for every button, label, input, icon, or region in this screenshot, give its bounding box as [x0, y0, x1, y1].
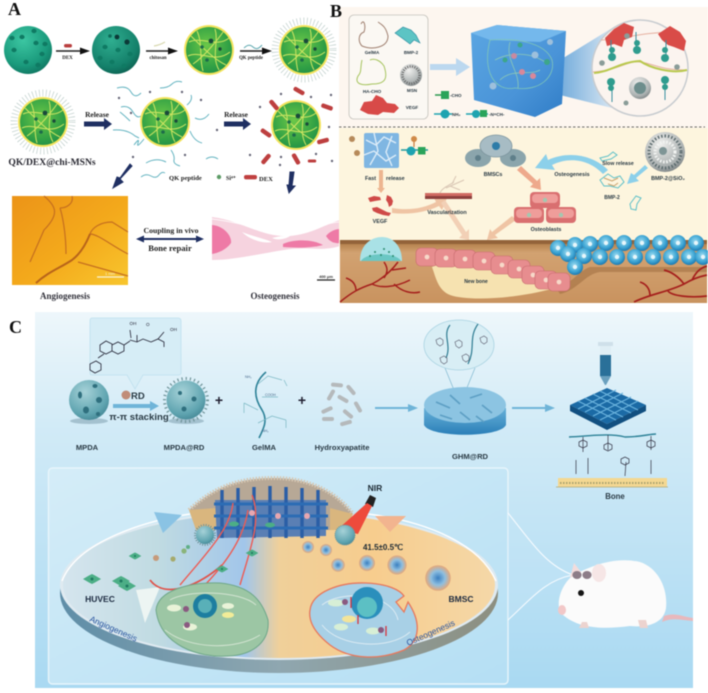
arrow: DEX loading: DEX [62, 56, 73, 61]
icon: MPDA@RD sphere [164, 378, 208, 424]
arrow: vessel to new bone [441, 200, 469, 240]
callout: RD molecule: OH [130, 321, 136, 326]
legend: QK peptide [169, 175, 202, 182]
arrow: osteogenesis curved [535, 154, 608, 174]
icon: GHM@RD hydrogel disc [424, 387, 506, 435]
hydrogel cube [471, 25, 566, 117]
stem cells [302, 541, 451, 591]
label: Fast release: release [386, 176, 405, 182]
magnified crosslink circle [592, 20, 688, 116]
label: RD: RD [131, 391, 145, 402]
label: Osteogenesis: Osteogenesis [250, 291, 300, 301]
arrow: to osteogenesis [287, 172, 295, 193]
label: Angiogenesis curved: Angiogenesis [88, 614, 139, 644]
panel: C [9, 312, 693, 688]
icon: mouse [558, 560, 693, 628]
chemical legend: -N=CH- [489, 112, 505, 117]
arrow: coupling in vivo: Bone repair [148, 243, 192, 253]
arrow: chitosan coating: chitosan [149, 56, 167, 61]
icon: QK/DEX@chi-MSNs sphere [14, 93, 72, 151]
icon: VEGF cluster [368, 195, 393, 216]
arrow: to printed scaffold [512, 404, 555, 412]
labels: components: GelMA [252, 443, 277, 452]
light wedge [136, 587, 160, 623]
label: GHM@RD: GHM@RD [452, 452, 489, 461]
zoom cone [560, 28, 612, 108]
legend [141, 172, 273, 183]
callout: RD molecule: O [146, 322, 150, 327]
legend box: components: MSN [407, 88, 418, 93]
label: BMP-2: BMP-2 [604, 195, 620, 201]
NIR laser: NIR [368, 483, 382, 493]
arrow: to hydrogel [430, 58, 470, 76]
label: Fast release: Fast [365, 176, 376, 182]
icon: blood vessel [425, 176, 472, 199]
panel: A [4, 0, 340, 301]
ring arc [62, 514, 496, 581]
funnel lines to mouse [508, 513, 573, 620]
chemical legend: -CHO [450, 93, 462, 98]
magnified polymer bubble [424, 320, 494, 395]
labels: components: Hydroxyapatite [315, 443, 369, 452]
icon: osteoblasts [514, 192, 576, 223]
legend: DEX [259, 176, 273, 183]
arrow: QK peptide grafting: QK peptide [239, 56, 263, 61]
arrow: QK peptide grafting [239, 45, 272, 61]
icon: GelMA chain [244, 372, 287, 438]
legend box: components: BMP-2 [404, 50, 419, 55]
icon: bone adhesion chemistry [556, 434, 668, 487]
callout: RD molecule: OH [170, 327, 177, 332]
icon: BMSCs cluster [465, 135, 526, 167]
icon: bare mesoporous silica sphere [4, 26, 52, 74]
labels: components [76, 443, 369, 452]
photo: angiogenesis [12, 196, 128, 285]
arrow: DEX loading [56, 44, 90, 61]
icon: MPDA sphere [69, 380, 109, 424]
chemical legend: NH₂ [452, 112, 460, 117]
icon: GelMA chain: COOH [265, 393, 276, 397]
labels: components: MPDA@RD [164, 443, 205, 452]
label: Slow release: Slow release [602, 161, 634, 167]
plus: + [215, 392, 223, 408]
label: Bone: Bone [605, 492, 625, 501]
label: RD [122, 390, 145, 402]
arrow: coupling in vivo: Coupling in vivo [143, 226, 199, 235]
legend box: components: GelMA [365, 50, 380, 55]
icon: printed scaffold [570, 388, 646, 430]
label: pi-pi stacking: π-π stacking [109, 412, 169, 423]
arrow: release to VEGF [377, 170, 385, 193]
label: Angiogenesis: Angiogenesis [40, 291, 90, 301]
legend box: components [349, 15, 428, 119]
endothelial cells [83, 550, 258, 591]
label: New bone: New bone [464, 279, 488, 285]
icon: QK peptide grafted sphere [275, 21, 333, 79]
icon: chitosan coated sphere [184, 25, 234, 75]
photo: angiogenesis: 1 mm [105, 271, 116, 276]
label: Vascularization: Vascularization [427, 210, 467, 216]
label: Osteoblasts: Osteoblasts [531, 227, 561, 233]
icon: hydrogel dome [360, 237, 402, 261]
hydrogel fast release block [349, 133, 428, 168]
blue stem cell layer [550, 235, 708, 275]
label: Osteogenesis curved: Osteogenesis [405, 618, 456, 648]
arrow: sphere to BMP-2 [627, 165, 648, 184]
photo: osteogenesis histology [212, 217, 340, 260]
blood vessels left [340, 262, 420, 302]
arrow: angiogenesis flow [154, 512, 182, 533]
NIR laser [335, 483, 382, 545]
arrow: VEGF to vessel [392, 198, 447, 214]
inner panel [48, 468, 508, 684]
panel: B [330, 1, 708, 303]
label: Fast release [365, 176, 405, 182]
label: QK/DEX@chi-MSNs: QK/DEX@chi-MSNs [8, 157, 96, 168]
icon: GelMA chain: NH₂ [245, 375, 252, 379]
arrow: chitosan coating [146, 42, 178, 61]
legend box: components: VEGF [406, 105, 418, 110]
lower section background [339, 128, 708, 243]
arrow: to GHM@RD [375, 404, 418, 412]
panel background [35, 312, 693, 688]
arrow: to angiogenesis [113, 164, 132, 188]
blood vessels right [634, 266, 707, 302]
scale bar [317, 274, 335, 280]
arrow: osteogenesis flow [375, 516, 406, 532]
icon: DEX loaded sphere [92, 26, 140, 74]
arrow: BMSC to osteoblast [517, 166, 541, 190]
panel background [339, 7, 708, 303]
icon: sphere releasing DEX rods [249, 86, 333, 166]
green HUVEC cell [156, 583, 268, 656]
ground: bone defect [340, 240, 707, 303]
osteoblast layer on new bone [416, 248, 570, 291]
released particles [153, 545, 190, 562]
panel letter B: B [330, 1, 342, 21]
plus: + [298, 392, 306, 408]
label: HUVEC: HUVEC [85, 594, 115, 604]
icon: sphere releasing QK peptide [113, 81, 218, 166]
dashed divider [339, 126, 705, 128]
label: VEGF: VEGF [373, 219, 388, 225]
label: BMSCs: BMSCs [484, 172, 502, 178]
arrow: release of DEX: Release [224, 110, 249, 119]
label: Osteogenesis: Osteogenesis [554, 172, 590, 178]
arrow: pi stacking [113, 401, 159, 411]
icon: hydroxyapatite particles [321, 382, 363, 426]
label: BMP-2@SiO2: BMP-2@SiO₂ [651, 176, 685, 182]
scale bar: 400 μm [319, 274, 333, 279]
icon: BMP-2@SiO2 sphere [645, 132, 685, 172]
temperature label: 41.5±0.5℃ [363, 543, 403, 552]
icon: GelMA chain: NH₂ [262, 429, 269, 433]
icon: BMP-2 proteins [600, 152, 641, 210]
scaffold dome on bone [180, 478, 353, 590]
icon: syringe [598, 342, 613, 385]
arrow: release of DEX [224, 110, 251, 130]
arrow: coupling in vivo [136, 226, 204, 253]
arrow: release of peptide [84, 110, 112, 130]
textured nanoparticle left [195, 525, 215, 545]
panel letter C: C [9, 317, 22, 337]
label: BMSC: BMSC [448, 594, 474, 604]
blue BMSC cell [310, 583, 417, 657]
legend: Si⁴⁺ [226, 175, 236, 182]
legend box: components: HA-CHO [363, 89, 382, 94]
arrow: osteoblast to bone [487, 216, 516, 240]
disc platform [60, 510, 498, 673]
callout: RD molecule [90, 318, 181, 389]
labels: components: MPDA [76, 443, 99, 452]
arrow: release of peptide: Release [85, 110, 110, 119]
chemical legend [434, 91, 505, 118]
red vessel loop [150, 565, 222, 589]
